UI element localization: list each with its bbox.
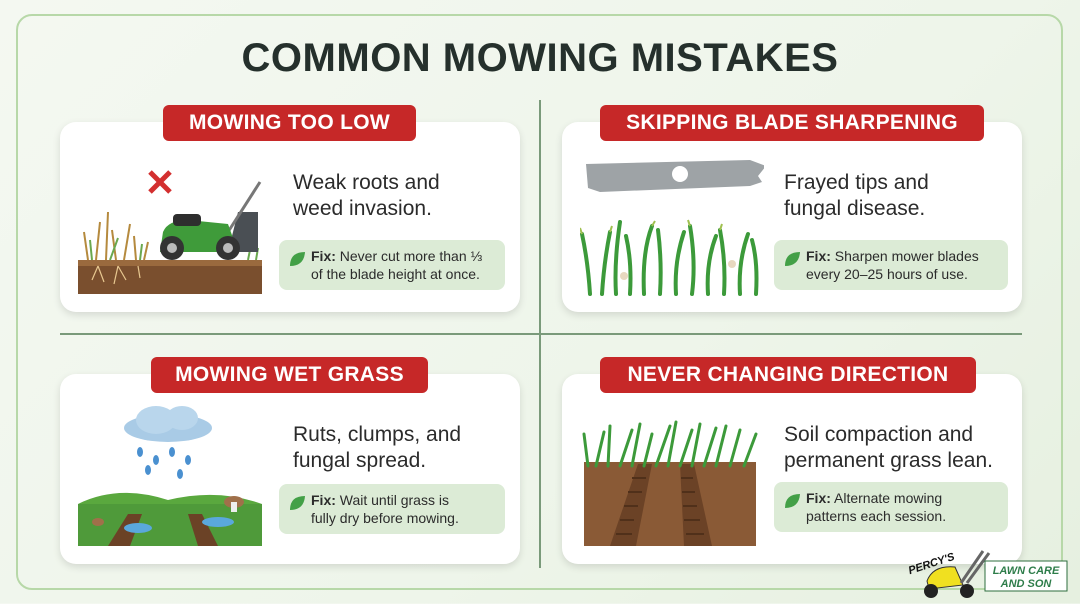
fix box: Fix: Sharpen mower blades [806, 248, 979, 264]
text: consequence: weed invasion. [293, 197, 432, 220]
pill: SKIPPING BLADE SHARPENING [626, 111, 958, 134]
illustration: rain cloud and muddy grass [78, 406, 262, 546]
pill: NEVER CHANGING DIRECTION [627, 363, 949, 386]
pill [151, 357, 428, 393]
text: consequence: Frayed tips and [784, 171, 929, 194]
text: consequence [293, 171, 440, 220]
pill [600, 105, 984, 141]
pill: mowing too low: MOWING TOO LOW [189, 111, 390, 134]
fix box [774, 240, 1008, 290]
text: consequence: Ruts, clumps, and [293, 423, 461, 446]
panel: skipping blade sharpening [562, 122, 1022, 312]
text: consequence: fungal disease. [784, 197, 925, 220]
illustration: dull blade and frayed grass [580, 160, 764, 296]
logo: Percy's Lawn Care and Son: PERCY'S [907, 551, 957, 577]
text: consequence: Soil compaction and [784, 423, 973, 446]
fix box [774, 482, 1008, 532]
text: consequence: permanent grass lean. [784, 449, 993, 472]
fix box: Fix: Alternate mowing [806, 490, 942, 506]
text: consequence [293, 423, 461, 472]
text: consequence: fungal spread. [293, 449, 426, 472]
fix box: Fix: Never cut more than ⅓ [311, 248, 482, 264]
fix box: of the blade height at once. [311, 266, 480, 282]
fix box [279, 240, 505, 290]
logo: Percy's Lawn Care and Son [907, 550, 1068, 598]
pill [600, 357, 976, 393]
logo: Percy's Lawn Care and Son: AND SON [1000, 578, 1052, 590]
fix box: every 20–25 hours of use. [806, 266, 968, 282]
fix box [279, 484, 505, 534]
fix box: Fix: Wait until grass is [311, 492, 449, 508]
panel: mowing wet grass [60, 374, 520, 564]
pill: mowing too low [163, 105, 416, 141]
panel: mowing too low [60, 122, 520, 312]
fix box: fully dry before mowing. [311, 510, 459, 526]
fix box: patterns each session. [806, 508, 946, 524]
illustration: lawn mower on short grass [78, 170, 262, 294]
panel: never changing direction [562, 374, 1022, 564]
text: consequence [784, 171, 929, 220]
text: consequence: Weak roots and [293, 171, 440, 194]
illustration: soil with tire ruts [582, 420, 758, 546]
title: COMMON MOWING MISTAKES [242, 36, 838, 80]
text: consequence [784, 423, 993, 472]
logo: Percy's Lawn Care and Son: LAWN CARE [993, 565, 1060, 577]
pill: MOWING WET GRASS [175, 363, 404, 386]
